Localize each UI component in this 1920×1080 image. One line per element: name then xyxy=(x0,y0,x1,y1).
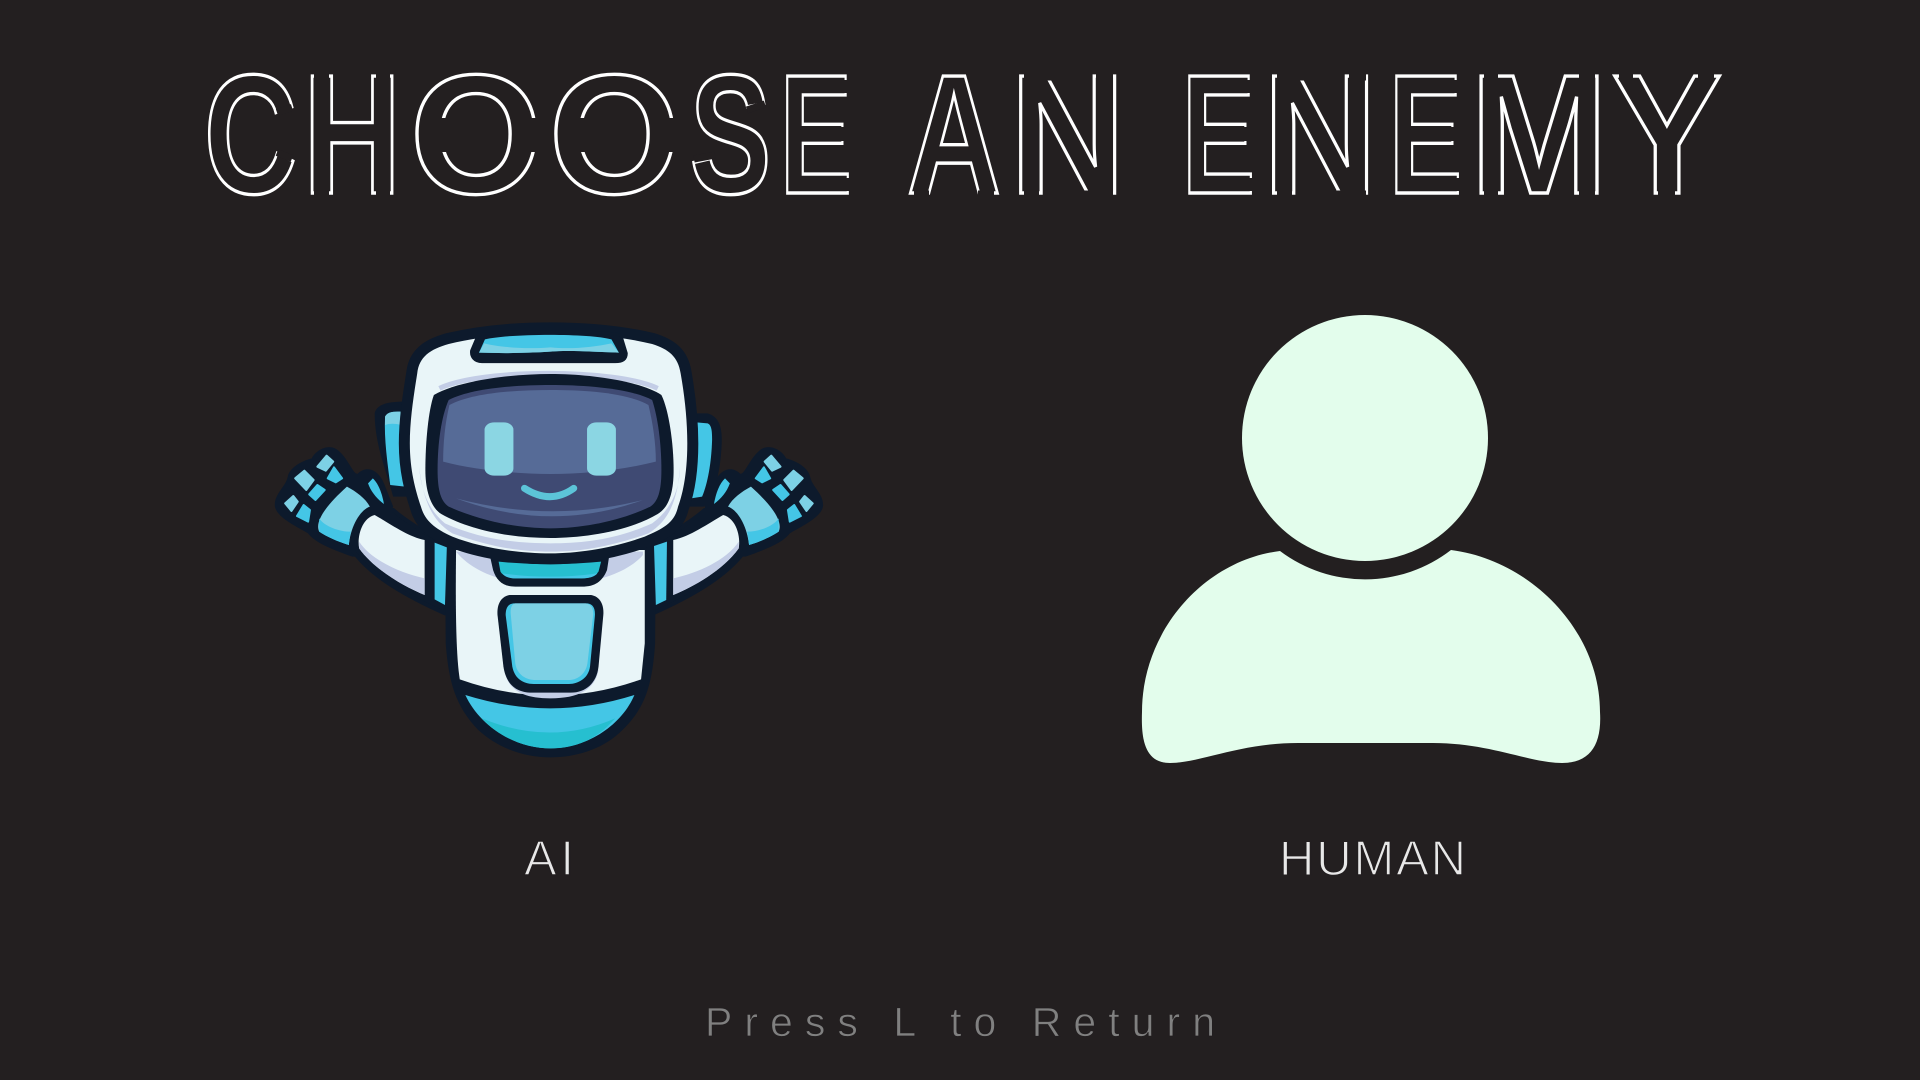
label: HUMAN: HUMAN xyxy=(1279,832,1466,886)
prompt: press L to return: Press L to Return xyxy=(705,999,1215,1045)
label: AI: AI xyxy=(524,832,574,886)
title xyxy=(208,72,1722,196)
